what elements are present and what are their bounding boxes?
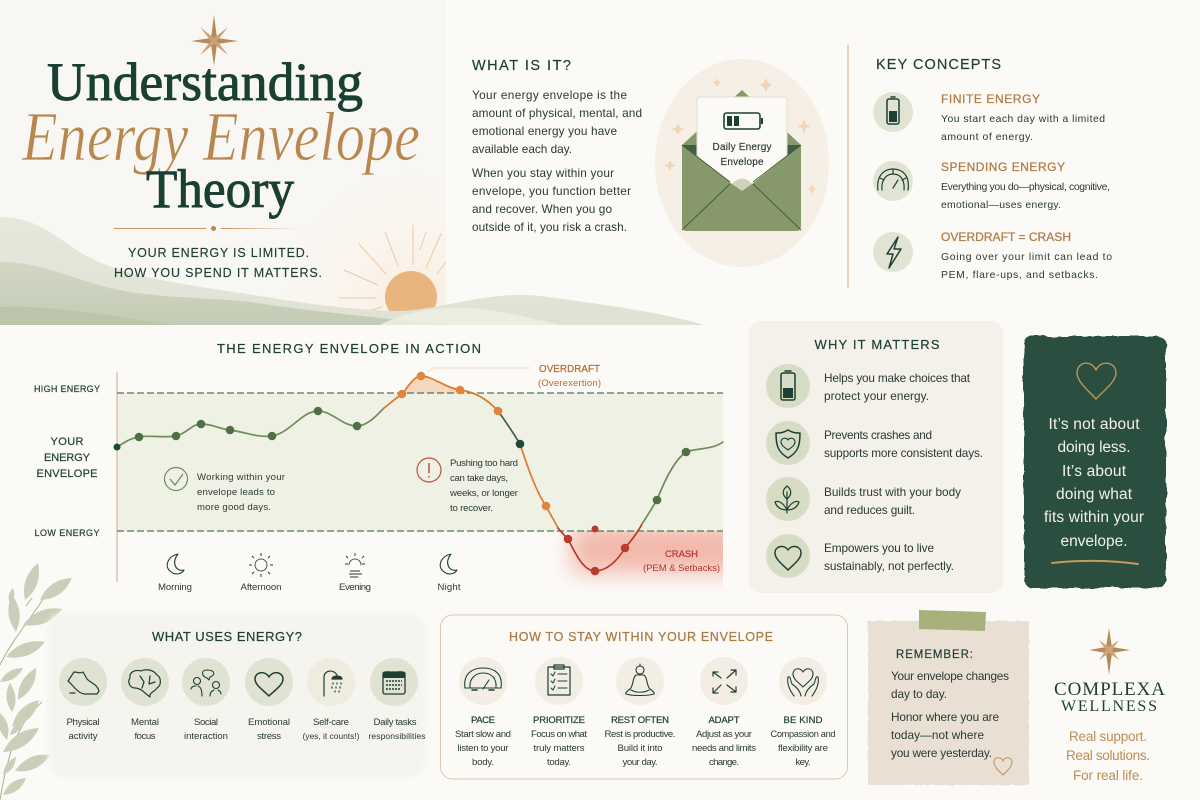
concept: overdraft: Going over your limit can lead to bbox=[941, 252, 1112, 263]
quote text: envelope. bbox=[1060, 533, 1128, 550]
title: Theory bbox=[146, 159, 294, 219]
time of day: morning: Morning bbox=[158, 582, 192, 593]
text block: definition: outside of it, you risk a crash. bbox=[472, 220, 627, 234]
quote card bbox=[1024, 336, 1166, 588]
tagline bbox=[114, 246, 322, 280]
concept: spending energy: SPENDING ENERGY bbox=[941, 160, 1065, 174]
data points bbox=[114, 372, 690, 575]
callout: within envelope: envelope leads to bbox=[197, 487, 275, 498]
crash label bbox=[643, 549, 720, 574]
heading: why it matters: WHY IT MATTERS bbox=[814, 337, 940, 352]
text block: definition: envelope, you function better bbox=[472, 184, 631, 198]
envelope back bbox=[682, 90, 801, 145]
item: physical activity: Physical bbox=[66, 717, 100, 728]
item: daily tasks: responsibilities bbox=[368, 731, 426, 741]
tip: be kind: BE KIND bbox=[784, 715, 823, 726]
logo tagline: Real support. bbox=[1069, 729, 1147, 744]
letter card: Daily Energy bbox=[712, 142, 772, 153]
icon: logo star bbox=[1089, 628, 1130, 675]
overdraft label bbox=[428, 364, 601, 389]
item: mental focus bbox=[121, 658, 169, 742]
logo tagline: Real solutions. bbox=[1066, 748, 1150, 763]
reason: builds trust: Builds trust with your body bbox=[824, 485, 961, 499]
crash label: CRASH bbox=[665, 549, 698, 560]
icon: gauge bbox=[878, 169, 908, 190]
quote text: doing less. bbox=[1058, 439, 1130, 456]
panel: what uses energy bbox=[48, 613, 426, 777]
tip: pace: Start slow and bbox=[455, 729, 511, 740]
time of day: afternoon bbox=[240, 553, 282, 593]
item: mental focus: Mental bbox=[131, 717, 159, 728]
tip: pace: body. bbox=[472, 757, 494, 768]
item: emotional stress: Emotional bbox=[248, 717, 290, 728]
tip: prioritize: PRIORITIZE bbox=[533, 715, 585, 726]
concept: overdraft: PEM, flare-ups, and setbacks. bbox=[941, 270, 1098, 281]
time of day: evening: Evening bbox=[339, 582, 371, 593]
reason: prevents crashes: supports more consistent days. bbox=[824, 446, 983, 460]
time of day: afternoon: Afternoon bbox=[240, 582, 282, 593]
heading: how to stay: HOW TO STAY WITHIN YOUR ENVELOPE bbox=[509, 630, 773, 644]
overdraft zone bbox=[402, 376, 476, 393]
concept: spending energy: Everything you do—physical, cognitive, bbox=[941, 182, 1110, 193]
concept: spending energy bbox=[873, 160, 1110, 211]
tip: rest often: your day. bbox=[622, 757, 658, 768]
icon: gold heart bbox=[1077, 363, 1116, 399]
sparkles bbox=[664, 78, 816, 194]
callout: pushing too hard: weeks, or longer bbox=[449, 488, 519, 499]
reason: empowers: Empowers you to live bbox=[824, 541, 934, 555]
panel: what is it bbox=[472, 58, 642, 234]
decoration: leaves bbox=[0, 563, 72, 800]
panel: why it matters bbox=[749, 321, 1003, 593]
icon: battery bbox=[724, 113, 763, 129]
icon: lightning bbox=[887, 237, 901, 268]
icon: compass star bbox=[191, 15, 238, 66]
concept: overdraft: OVERDRAFT = CRASH bbox=[941, 230, 1071, 244]
item: daily tasks bbox=[368, 658, 426, 741]
tip: adapt: Adjust as your bbox=[696, 729, 753, 740]
item: self-care: (yes, it counts!) bbox=[302, 731, 360, 741]
concept: finite energy bbox=[873, 92, 1105, 143]
illustration: daily energy envelope bbox=[655, 59, 829, 267]
axis labels: ENERGY bbox=[44, 452, 91, 464]
tip: rest often bbox=[604, 657, 676, 768]
time of day: evening bbox=[339, 553, 371, 593]
item: social interaction bbox=[182, 658, 230, 742]
callout: pushing too hard: Pushing too hard bbox=[450, 458, 518, 469]
heading: key concepts: KEY CONCEPTS bbox=[876, 57, 1001, 73]
text block: definition: and recover. When you go bbox=[472, 202, 612, 216]
item: physical activity: activity bbox=[68, 731, 98, 742]
text block: definition: When you stay within your bbox=[472, 166, 614, 180]
tip: rest often: Rest is productive. bbox=[604, 729, 676, 740]
item: self-care bbox=[302, 658, 360, 741]
concept: spending energy: emotional—uses energy. bbox=[941, 200, 1061, 211]
logo: complexa wellness: COMPLEXA bbox=[1054, 679, 1165, 700]
text block: definition: available each day. bbox=[472, 142, 572, 156]
tip: adapt: change. bbox=[709, 757, 739, 768]
logo tagline bbox=[1066, 729, 1150, 783]
tip: rest often: REST OFTEN bbox=[611, 715, 669, 726]
tip: adapt: needs and limits bbox=[692, 743, 756, 754]
heading: what uses energy: WHAT USES ENERGY? bbox=[152, 629, 302, 644]
title: Understanding bbox=[47, 52, 363, 112]
envelope front bbox=[682, 145, 801, 231]
item: self-care: Self-care bbox=[313, 717, 349, 728]
hero panel bbox=[0, 0, 704, 325]
overdraft label: OVERDRAFT bbox=[539, 364, 600, 375]
tip: be kind bbox=[770, 657, 836, 768]
note text: today—not where bbox=[891, 728, 984, 742]
gold underline bbox=[1052, 561, 1138, 564]
reason: builds trust bbox=[766, 477, 961, 521]
band: safe envelope bbox=[117, 393, 723, 531]
tip: be kind: Compassion and bbox=[770, 729, 836, 739]
crash zone bbox=[572, 525, 742, 573]
logo: complexa wellness bbox=[1054, 628, 1165, 783]
heading: what is it: WHAT IS IT? bbox=[472, 58, 571, 74]
chart: the energy envelope in action bbox=[34, 341, 742, 593]
item: emotional stress: stress bbox=[257, 731, 281, 742]
reason: empowers: sustainably, not perfectly. bbox=[824, 559, 954, 573]
letter card bbox=[697, 97, 787, 197]
tip: be kind: flexibility are bbox=[778, 743, 828, 754]
reason: protect energy: protect your energy. bbox=[824, 389, 929, 403]
panel: how to stay within your envelope bbox=[440, 615, 848, 779]
tip: adapt: ADAPT bbox=[708, 715, 740, 726]
note text: day to day. bbox=[891, 687, 947, 701]
tip: prioritize: today. bbox=[547, 757, 571, 768]
text block: definition: amount of physical, mental, and bbox=[472, 106, 642, 120]
icon: small heart bbox=[994, 758, 1012, 775]
callout: pushing too hard bbox=[417, 458, 519, 514]
crash label: (PEM & Setbacks) bbox=[643, 563, 720, 574]
logo tagline: For real life. bbox=[1073, 768, 1143, 783]
reason: protect energy bbox=[766, 364, 971, 408]
item: physical activity bbox=[59, 658, 107, 742]
axis labels: LOW ENERGY bbox=[34, 528, 100, 538]
note text: Honor where you are bbox=[891, 710, 999, 724]
time of day: night: Night bbox=[438, 582, 461, 593]
reason: prevents crashes: Prevents crashes and bbox=[824, 428, 932, 442]
tape bbox=[919, 610, 986, 631]
panel: key concepts bbox=[848, 45, 1112, 288]
quote text bbox=[1044, 416, 1144, 550]
axis labels: HIGH ENERGY bbox=[34, 384, 100, 394]
quote text: It’s about bbox=[1062, 463, 1127, 480]
tip: pace: listen to your bbox=[458, 743, 509, 754]
item: daily tasks: Daily tasks bbox=[374, 717, 417, 728]
axis labels: YOUR bbox=[50, 436, 84, 448]
concept: finite energy: You start each day with a limited bbox=[941, 114, 1105, 125]
item: social interaction: interaction bbox=[184, 731, 228, 742]
note heading: REMEMBER: bbox=[896, 649, 973, 661]
text block: definition bbox=[472, 88, 642, 234]
callout: within envelope bbox=[164, 468, 286, 513]
quote text: It’s not about bbox=[1048, 416, 1140, 433]
item: emotional stress bbox=[245, 658, 293, 742]
tip: be kind: key. bbox=[796, 757, 810, 768]
note text: you were yesterday. bbox=[891, 746, 992, 760]
reason: empowers bbox=[766, 534, 954, 578]
title: Energy Envelope bbox=[21, 99, 420, 176]
callout: pushing too hard: can take days, bbox=[450, 473, 508, 484]
time of day: night bbox=[438, 554, 461, 593]
tagline: YOUR ENERGY IS LIMITED. bbox=[128, 246, 309, 260]
energy line bbox=[117, 376, 723, 571]
note text bbox=[891, 669, 1009, 760]
sun with rays bbox=[339, 225, 446, 323]
tip: pace bbox=[455, 657, 511, 768]
tip: rest often: Build it into bbox=[618, 743, 662, 754]
item: social interaction: Social bbox=[194, 717, 218, 728]
item: mental focus: focus bbox=[134, 731, 156, 742]
text block: definition: emotional energy you have bbox=[472, 124, 617, 138]
axis labels bbox=[34, 384, 100, 538]
reason: builds trust: and reduces guilt. bbox=[824, 503, 915, 517]
callout: pushing too hard: to recover. bbox=[450, 503, 493, 514]
overdraft label: (Overexertion) bbox=[538, 378, 601, 389]
quote text: fits within your bbox=[1044, 509, 1144, 526]
callout: within envelope: more good days. bbox=[197, 502, 271, 513]
logo: complexa wellness: WELLNESS bbox=[1061, 698, 1157, 715]
icon: battery bbox=[887, 97, 899, 124]
concept: finite energy: amount of energy. bbox=[941, 132, 1033, 143]
reason: protect energy: Helps you make choices that bbox=[824, 371, 971, 385]
quote text: doing what bbox=[1056, 486, 1133, 503]
tip: prioritize: truly matters bbox=[534, 743, 585, 754]
mountains bbox=[0, 217, 704, 325]
text block: definition: Your energy envelope is the bbox=[472, 88, 627, 102]
tip: prioritize bbox=[531, 657, 587, 768]
tip: pace: PACE bbox=[471, 715, 495, 726]
letter card: Envelope bbox=[720, 157, 764, 168]
divider bbox=[114, 226, 300, 231]
tip: prioritize: Focus on what bbox=[531, 729, 587, 740]
tip: adapt bbox=[692, 657, 756, 768]
concept: finite energy: FINITE ENERGY bbox=[941, 92, 1040, 106]
concept: overdraft bbox=[873, 230, 1112, 281]
reason: prevents crashes bbox=[766, 421, 983, 465]
note: remember bbox=[868, 610, 1029, 785]
tagline: HOW YOU SPEND IT MATTERS. bbox=[114, 266, 322, 280]
callout: within envelope: Working within your bbox=[197, 472, 286, 483]
axis labels: ENVELOPE bbox=[36, 468, 98, 480]
chart heading: THE ENERGY ENVELOPE IN ACTION bbox=[217, 341, 481, 356]
title bbox=[21, 52, 420, 219]
time of day: morning bbox=[158, 554, 192, 593]
note text: Your envelope changes bbox=[891, 669, 1009, 683]
